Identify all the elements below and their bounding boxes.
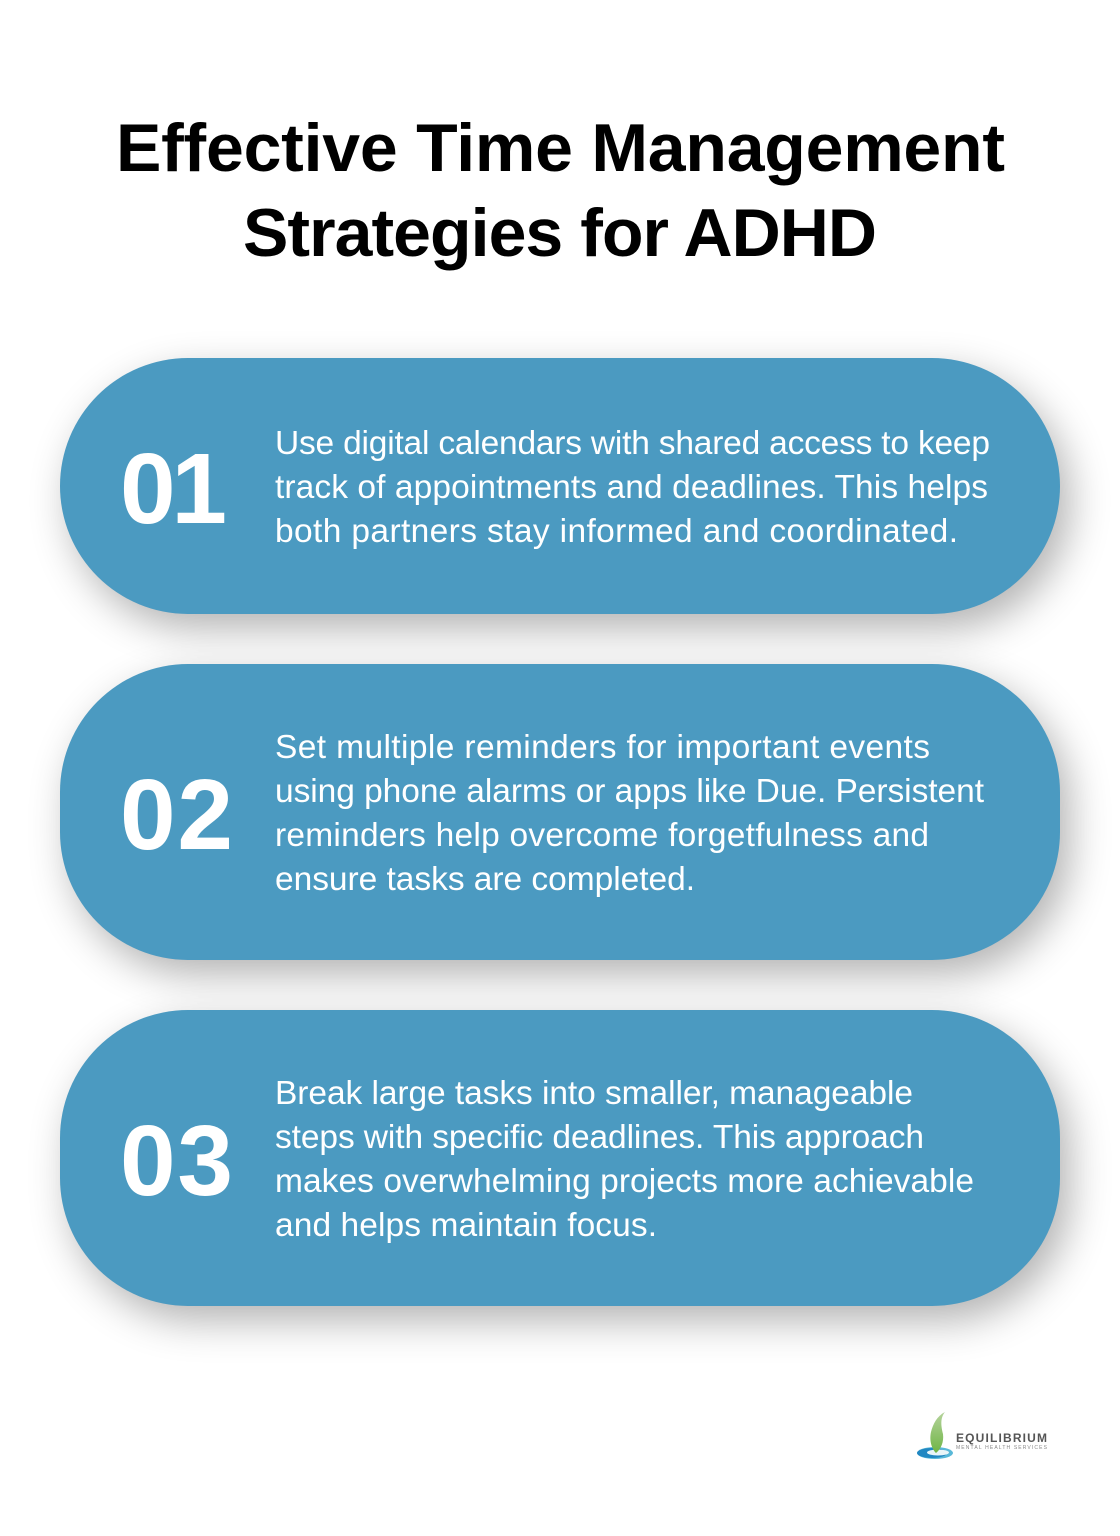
text: step 01 description: both partners stay informed and coordinated. xyxy=(275,513,958,550)
text: step 01 description: track of appointments and deadlines. This helps xyxy=(275,469,988,506)
text: step 02 description: Set multiple reminders for important events xyxy=(275,729,930,766)
text: step 03 description: and helps maintain focus. xyxy=(275,1207,657,1244)
icon: leaf xyxy=(930,1412,945,1453)
icon: water ripple xyxy=(917,1447,953,1459)
text: step 02 description: using phone alarms or apps like Due. Persistent xyxy=(275,773,985,810)
text: step 01 description: Use digital calendars with shared access to keep xyxy=(275,425,990,462)
text: step 02 description: reminders help overcome forgetfulness and xyxy=(275,817,929,854)
logo: Equilibrium Mental Health Services xyxy=(917,1412,1048,1459)
text: step 01 description xyxy=(275,425,990,550)
panel: step 01 xyxy=(60,358,1060,614)
text: step 02 description: ensure tasks are completed. xyxy=(275,861,695,898)
logo tagline: MENTAL HEALTH SERVICES xyxy=(956,1445,1048,1451)
panel: step 02 xyxy=(60,664,1060,960)
text: step 03 description: makes overwhelming projects more achievable xyxy=(275,1163,974,1200)
logo wordmark: EQUILIBRIUM xyxy=(956,1431,1047,1445)
number 02: 02 xyxy=(120,759,233,871)
number 01: 01 xyxy=(120,433,227,545)
text: step 03 description xyxy=(275,1075,974,1244)
text: step 03 description: Break large tasks into smaller, manageable xyxy=(275,1075,913,1112)
text: step 03 description: steps with specific deadlines. This approach xyxy=(275,1119,924,1156)
title xyxy=(116,110,1005,271)
number 03: 03 xyxy=(120,1105,233,1217)
text: step 02 description xyxy=(275,729,985,898)
panel: step 03 xyxy=(60,1010,1060,1306)
title: Effective Time Management xyxy=(116,110,1005,186)
title: Strategies for ADHD xyxy=(243,195,877,271)
